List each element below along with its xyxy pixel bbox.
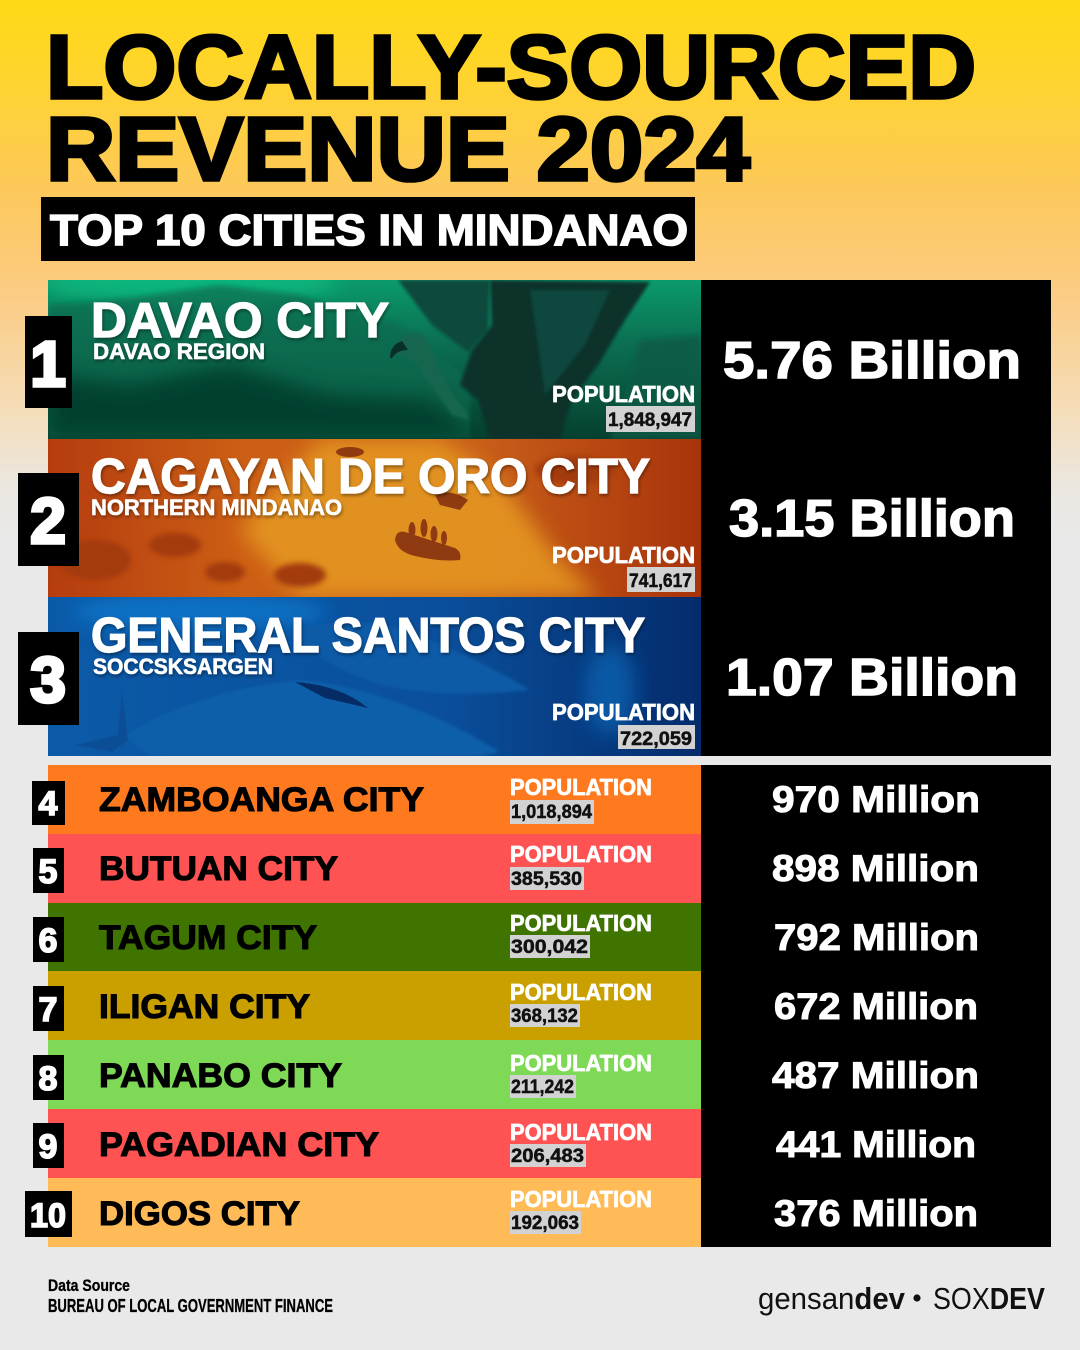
row 9: Pagadian City: 441 Million bbox=[776, 1124, 976, 1165]
subtitle banner: TOP 10 CITIES IN MINDANAO bbox=[50, 206, 688, 255]
population bbox=[552, 699, 695, 750]
population bbox=[552, 542, 695, 592]
title: REVENUE 2024 bbox=[46, 100, 750, 200]
row 4: Zamboanga City bbox=[32, 765, 980, 834]
row 9: Pagadian City: 9 bbox=[39, 1128, 57, 1166]
title: LOCALLY-SOURCED bbox=[46, 18, 976, 118]
row 4: Zamboanga City: 1,018,894 bbox=[511, 802, 592, 823]
data source: BUREAU OF LOCAL GOVERNMENT FINANCE bbox=[48, 1296, 333, 1316]
population: 722,059 bbox=[620, 729, 692, 750]
rank 1 badge: 1 bbox=[30, 328, 66, 400]
row 5: Butuan City: POPULATION bbox=[510, 841, 652, 867]
row 7: Iligan City: 7 bbox=[39, 991, 57, 1029]
rank 1 badge bbox=[25, 316, 72, 408]
row 8: Panabo City: POPULATION bbox=[510, 1050, 652, 1076]
row 7: Iligan City: 368,132 bbox=[511, 1006, 578, 1027]
row 5: Butuan City: 898 Million bbox=[772, 848, 979, 889]
panel: Cagayan de Oro City bbox=[48, 439, 701, 597]
city name and region: CAGAYAN DE ORO CITY bbox=[91, 450, 650, 504]
row 8: Panabo City: 487 Million bbox=[772, 1055, 979, 1096]
city name and region: SOCCSKSARGEN bbox=[93, 654, 273, 679]
row 8: Panabo City: 8 bbox=[39, 1060, 57, 1098]
image: river rafting bbox=[48, 439, 701, 597]
row 4: Zamboanga City: POPULATION bbox=[510, 774, 652, 800]
logos: gensandev and SOXDEV bbox=[758, 1281, 1045, 1316]
row 10: Digos City: 10 bbox=[30, 1197, 66, 1235]
panel: General Santos City bbox=[48, 594, 701, 756]
rank 2 badge bbox=[18, 473, 79, 566]
row 9: Pagadian City bbox=[33, 1109, 976, 1178]
population: 1,848,947 bbox=[608, 410, 692, 431]
row 6: Tagum City: 6 bbox=[39, 922, 57, 960]
row 10: Digos City: 376 Million bbox=[774, 1193, 978, 1234]
row 5: Butuan City: 385,530 bbox=[511, 869, 582, 890]
city name and region: DAVAO REGION bbox=[93, 339, 265, 364]
row 5: Butuan City: BUTUAN CITY bbox=[99, 850, 338, 888]
revenue: Davao City: 5.76 Billion bbox=[723, 332, 1021, 390]
revenue: Cagayan de Oro City: 3.15 Billion bbox=[729, 490, 1015, 548]
black revenue column: ranks 4 to 10 bbox=[701, 765, 1051, 1247]
row 7: Iligan City: ILIGAN CITY bbox=[99, 988, 310, 1026]
city name and region: NORTHERN MINDANAO bbox=[91, 495, 342, 520]
population: POPULATION bbox=[552, 699, 695, 725]
row 6: Tagum City: 300,042 bbox=[511, 937, 588, 958]
image: tuna fish bbox=[48, 594, 701, 756]
population: 741,617 bbox=[629, 571, 692, 592]
row 5: Butuan City bbox=[33, 834, 979, 903]
row 6: Tagum City bbox=[33, 903, 979, 971]
row 10: Digos City bbox=[25, 1178, 978, 1247]
row 6: Tagum City: 792 Million bbox=[774, 917, 979, 958]
rank 3 badge: 3 bbox=[30, 644, 66, 716]
city name and region: DAVAO CITY bbox=[91, 294, 389, 348]
rank 2 badge: 2 bbox=[30, 485, 66, 557]
row 7: Iligan City: 672 Million bbox=[774, 986, 978, 1027]
panel: Davao City bbox=[48, 280, 701, 439]
row 6: Tagum City: TAGUM CITY bbox=[99, 919, 317, 957]
population bbox=[552, 381, 695, 432]
data source bbox=[48, 1276, 333, 1316]
row 10: Digos City: 192,063 bbox=[511, 1213, 579, 1234]
population: POPULATION bbox=[552, 542, 695, 568]
row 9: Pagadian City: POPULATION bbox=[510, 1119, 652, 1145]
row 5: Butuan City: 5 bbox=[39, 853, 57, 891]
row 9: Pagadian City: PAGADIAN CITY bbox=[99, 1126, 379, 1164]
image: eagle over green mountains bbox=[48, 280, 701, 439]
black revenue column: top three bbox=[701, 280, 1051, 756]
row 6: Tagum City: POPULATION bbox=[510, 910, 652, 936]
row 8: Panabo City: 211,242 bbox=[511, 1077, 574, 1098]
row 4: Zamboanga City: 4 bbox=[39, 785, 58, 823]
city name and region: GENERAL SANTOS CITY bbox=[91, 609, 645, 663]
rank 3 badge bbox=[18, 632, 79, 725]
row 8: Panabo City: PANABO CITY bbox=[99, 1057, 342, 1095]
logos: gensandev and SOXDEV: SOXDEV bbox=[933, 1281, 1045, 1316]
population: POPULATION bbox=[552, 381, 695, 407]
row 7: Iligan City bbox=[33, 971, 978, 1040]
revenue: General Santos City: 1.07 Billion bbox=[726, 649, 1018, 707]
row 9: Pagadian City: 206,483 bbox=[511, 1146, 584, 1167]
row 4: Zamboanga City: ZAMBOANGA CITY bbox=[99, 781, 424, 819]
row 7: Iligan City: POPULATION bbox=[510, 979, 652, 1005]
title bbox=[46, 18, 976, 200]
row 8: Panabo City bbox=[33, 1040, 979, 1109]
data source: Data Source bbox=[48, 1276, 130, 1295]
row 4: Zamboanga City: 970 Million bbox=[772, 779, 980, 820]
row 10: Digos City: POPULATION bbox=[510, 1186, 652, 1212]
row 10: Digos City: DIGOS CITY bbox=[99, 1195, 300, 1233]
logos: gensandev and SOXDEV: gensandev bbox=[758, 1281, 906, 1316]
